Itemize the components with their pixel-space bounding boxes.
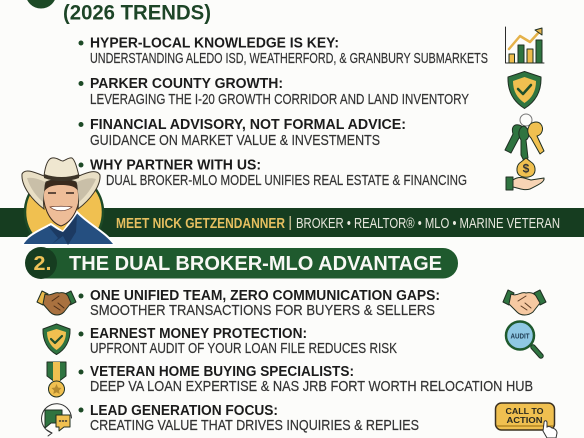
- call to action button: ACTION: [506, 415, 542, 425]
- smile: [50, 206, 72, 211]
- bullet: hyper-local knowledge: HYPER-LOCAL KNOWLEDGE IS KEY:: [90, 36, 339, 52]
- portrait: cowboy hat illustration: [22, 158, 115, 251]
- bullet list: section 2: [78, 288, 533, 434]
- icon: shield with check: [508, 72, 541, 108]
- bullet: veteran home buying: VETERAN HOME BUYING SPECIALISTS:: [90, 364, 354, 380]
- icon: house coin over open hand: [506, 158, 544, 190]
- bullet: parker county growth: [78, 76, 469, 108]
- bullet: parker county growth: PARKER COUNTY GROWTH:: [90, 76, 283, 92]
- section 2 heading pill: [25, 247, 458, 279]
- icon: house coin over open hand: $: [523, 162, 530, 176]
- neck and face: [44, 185, 78, 226]
- bullet: financial advisory: FINANCIAL ADVISORY, NOT FORMAL ADVICE:: [90, 117, 406, 133]
- bullet: veteran home buying: [78, 364, 533, 395]
- banner: meet nick getzendanner: MEET NICK GETZENDANNER: [116, 215, 285, 232]
- banner: meet nick getzendanner: [0, 208, 584, 237]
- bullet: earnest money protection: UPFRONT AUDIT OF YOUR LOAN FILE REDUCES RISK: [90, 341, 397, 357]
- shirt: [22, 212, 115, 245]
- bullet: earnest money protection: [78, 326, 397, 357]
- bullet: one unified team: [78, 288, 440, 319]
- icon: green-cuffed handshake: [503, 290, 546, 315]
- bullet: why partner with us: WHY PARTNER WITH US:: [90, 158, 261, 174]
- bullet: why partner with us: [78, 158, 467, 189]
- hat band: [44, 174, 79, 181]
- icon: brown handshake: [37, 291, 76, 315]
- hair: [44, 180, 78, 192]
- bullet: earnest money protection: EARNEST MONEY PROTECTION:: [90, 326, 307, 342]
- hat crown: [44, 158, 79, 179]
- icon: growth bar chart: [506, 27, 544, 63]
- section 1 number badge: [26, 0, 56, 8]
- hat brim: [22, 171, 100, 209]
- section 2 heading pill: THE DUAL BROKER-MLO ADVANTAGE: [69, 253, 442, 275]
- sun disc behind portrait: [24, 174, 104, 234]
- call to action button: CALL TO: [506, 406, 544, 416]
- bullet: parker county growth: LEVERAGING THE I-20 GROWTH CORRIDOR AND LAND INVENTORY: [90, 92, 469, 108]
- bullet list: section 1: [78, 36, 488, 189]
- bullet: lead generation: [78, 403, 419, 434]
- bullet: financial advisory: [78, 117, 406, 149]
- bullet: financial advisory: GUIDANCE ON MARKET VALUE & INVESTMENTS: [90, 133, 380, 149]
- icon: keys: [505, 114, 544, 161]
- icon: audit magnifying glass: AUDIT: [510, 332, 530, 340]
- section 2 heading pill: 2.: [34, 253, 52, 275]
- bullet: lead generation: LEAD GENERATION FOCUS:: [90, 403, 278, 419]
- bullet: one unified team: SMOOTHER TRANSACTIONS FOR BUYERS & SELLERS: [90, 303, 435, 319]
- icon: pointer hand: [543, 421, 557, 438]
- icon: military medal: [47, 362, 66, 397]
- bullet: hyper-local knowledge: [78, 36, 488, 67]
- call to action button: [496, 403, 557, 438]
- bullet: one unified team: ONE UNIFIED TEAM, ZERO COMMUNICATION GAPS:: [90, 288, 440, 304]
- eyes: [48, 192, 74, 194]
- section 1 heading: (2026 TRENDS): [63, 2, 211, 24]
- bullet: why partner with us: DUAL BROKER-MLO MODEL UNIFIES REAL ESTATE & FINANCING: [106, 173, 467, 189]
- icon: chat bubbles in circular arrow: [42, 404, 72, 436]
- bullet: lead generation: CREATING VALUE THAT DRIVES INQUIRIES & REPLIES: [90, 418, 419, 434]
- icon: audit magnifying glass: [506, 322, 541, 356]
- icon: shield with check, left: [43, 324, 70, 354]
